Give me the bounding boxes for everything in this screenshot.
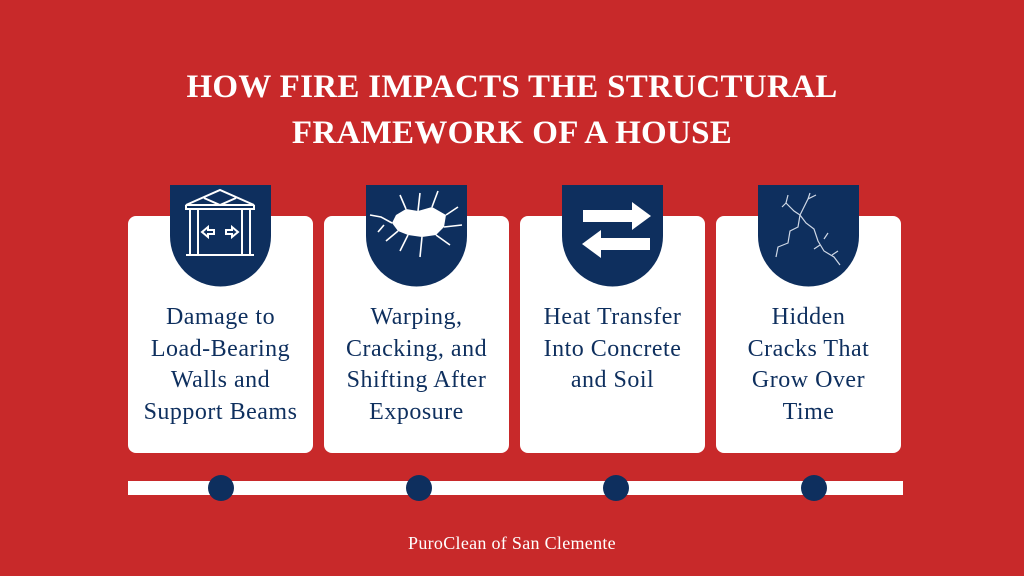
card 3: Into Concrete [544,336,681,362]
card 4: Time [783,398,834,424]
card 2: Shifting After [347,367,486,393]
card 3: Heat Transfer [544,304,681,330]
title: FRAMEWORK OF A HOUSE [292,115,732,151]
icon: arrows shield [562,185,663,286]
card 1: Support Beams [144,398,297,424]
timeline dot 4 [801,475,827,501]
card 3 [520,216,705,453]
card 4: Grow Over [752,367,865,393]
card 1: Load-Bearing [151,336,290,362]
card 3: and Soil [571,367,654,393]
timeline dot 1 [208,475,234,501]
icon: cracks shield [758,185,859,286]
footer: PuroClean of San Clemente [408,533,616,553]
timeline bar [128,481,903,495]
card 2: Exposure [369,398,464,424]
card 4: Cracks That [748,336,869,362]
icon: crack burst shield [366,185,467,286]
card 1: Damage to [166,304,275,330]
card 2 [324,216,509,453]
card 2: Warping, [370,304,463,330]
card 1: Walls and [171,367,270,393]
card 1 [128,216,313,453]
title [186,69,838,151]
card 4: Hidden [772,304,845,330]
card 2: Cracking, and [346,336,487,362]
timeline dot 3 [603,475,629,501]
icon: building shield [170,185,271,286]
title: HOW FIRE IMPACTS THE STRUCTURAL [186,69,838,105]
card 4 [716,216,901,453]
timeline dot 2 [406,475,432,501]
